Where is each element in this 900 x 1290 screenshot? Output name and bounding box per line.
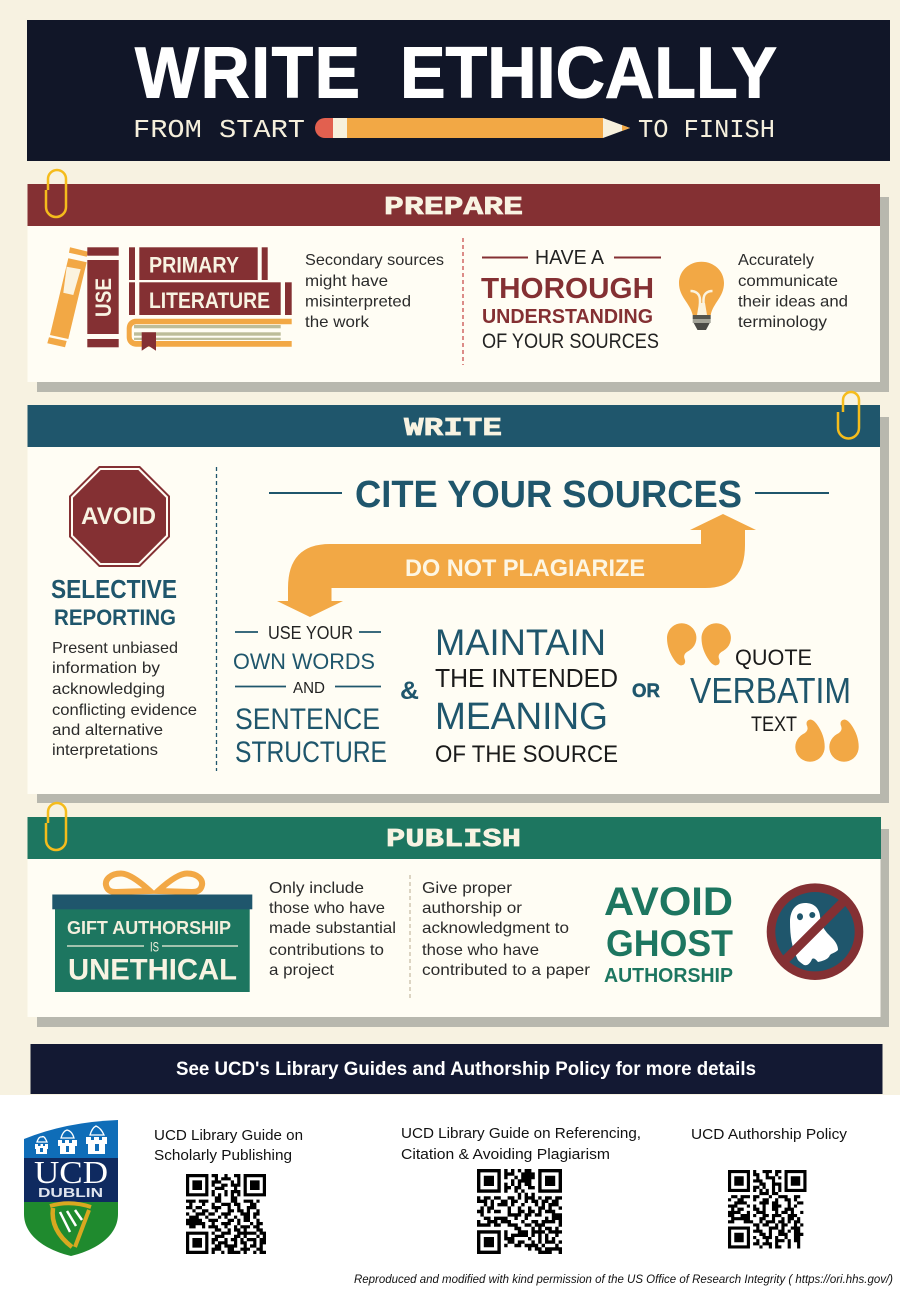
heading: avoid ghost authorship: AVOID <box>604 880 733 924</box>
arrow: do not plagiarize <box>277 514 756 617</box>
write heading band: WRITE <box>404 413 502 443</box>
text: only include contributors <box>269 880 396 979</box>
text: quote verbatim text: TEXT <box>751 713 797 736</box>
icon: gift box: UNETHICAL <box>68 954 237 986</box>
text: maintain the intended meaning: MEANING <box>435 696 608 738</box>
text: secondary sources: misinterpreted <box>305 294 411 310</box>
subtitle: from start: FROM START <box>133 115 305 145</box>
text: give proper authorship: those who have <box>422 942 539 959</box>
text: secondary sources: the work <box>305 314 370 331</box>
arrow: do not plagiarize: DO NOT PLAGIARIZE <box>405 555 645 582</box>
logo wordmark: UCD <box>34 1154 108 1190</box>
publish heading band <box>28 817 881 859</box>
text: library guide on scholarly publishing <box>154 1127 303 1164</box>
text: referencing guide: UCD Library Guide on Referencing, <box>401 1125 641 1142</box>
text: secondary sources <box>305 252 444 331</box>
text: use your own words and sentence structure: OWN WORDS <box>233 649 375 674</box>
icon: pencil <box>315 118 630 138</box>
write heading band <box>28 405 880 447</box>
harp <box>50 1203 91 1247</box>
text: library guide on scholarly publishing: UCD Library Guide on <box>154 1127 303 1144</box>
text: maintain the intended meaning: MAINTAIN <box>435 622 606 663</box>
text: give proper authorship: authorship or <box>422 900 523 917</box>
QR code: referencing guide <box>477 1169 562 1257</box>
text: secondary sources: Secondary sources <box>305 252 444 269</box>
text: referencing guide: Citation & Avoiding Plagiarism <box>401 1146 610 1163</box>
text: quote verbatim text <box>690 645 851 736</box>
panel: write <box>28 392 889 803</box>
ampersand: & <box>400 677 419 705</box>
subtitle: to finish: TO FINISH <box>638 115 775 145</box>
text: only include contributors: Only include <box>269 880 364 897</box>
prepare heading band: PREPARE <box>384 192 523 222</box>
text: unbiased information <box>52 640 197 759</box>
icon: opening quotation marks <box>667 623 731 666</box>
heading: have a thorough understanding <box>481 247 661 353</box>
text: maintain the intended meaning: OF THE SOURCE <box>435 741 618 768</box>
text: unbiased information: information by <box>52 660 160 677</box>
footer bar: See UCD's Library Guides and Authorship Policy for more details <box>176 1058 756 1080</box>
text: give proper authorship <box>422 880 591 979</box>
heading: avoid ghost authorship: AUTHORSHIP <box>604 964 733 987</box>
text: only include contributors: a project <box>269 962 335 979</box>
text: quote verbatim text: VERBATIM <box>690 670 851 711</box>
text: accurately communicate: terminology <box>738 314 827 331</box>
text: only include contributors: made substantial <box>269 920 396 937</box>
castles <box>35 1126 107 1154</box>
text: unbiased information: conflicting evidence <box>52 702 197 719</box>
text: secondary sources: might have <box>305 273 388 290</box>
icon: stack of books: LITERATURE <box>149 288 270 313</box>
text: unbiased information: Present unbiased <box>52 640 178 657</box>
icon: paperclip <box>46 803 66 850</box>
text: quote verbatim text: QUOTE <box>735 645 812 670</box>
prepare heading band <box>28 184 880 226</box>
footer bar <box>30 1044 882 1094</box>
text: accurately communicate: their ideas and <box>738 294 848 310</box>
credit line: Reproduced and modified with kind permission of the US Office of Research Integrity ( https://ori.hhs.gov/) <box>354 1274 893 1286</box>
heading: cite your sources: CITE YOUR SOURCES <box>355 474 742 516</box>
heading: avoid ghost authorship: GHOST <box>606 923 733 964</box>
text: unbiased information: and alternative <box>52 722 163 739</box>
text: only include contributors: contributions to <box>269 942 384 959</box>
or connector: OR <box>632 681 660 702</box>
text: use your own words and sentence structure: SENTENCE <box>235 703 380 736</box>
icon: avoid stop sign: AVOID <box>81 503 156 530</box>
icon: gift box <box>52 874 252 992</box>
icon: gift box: IS <box>150 940 159 954</box>
icon: stack of books: USE <box>91 278 116 317</box>
heading: selective reporting: SELECTIVE <box>51 574 177 604</box>
heading: have a thorough understanding: HAVE A <box>535 247 605 269</box>
icon: avoid stop sign <box>69 466 170 567</box>
text: authorship policy: UCD Authorship Policy <box>691 1126 848 1143</box>
panel: publish <box>28 803 889 1027</box>
text: unbiased information: interpretations <box>52 742 158 759</box>
icon: paperclip <box>838 392 859 438</box>
heading: have a thorough understanding: UNDERSTANDING <box>482 305 653 328</box>
publish heading band: PUBLISH <box>386 824 521 854</box>
icon: closing quotation marks <box>795 720 859 762</box>
text: give proper authorship: contributed to a paper <box>422 962 591 979</box>
text: accurately communicate: communicate <box>738 273 838 290</box>
text: give proper authorship: acknowledgment to <box>422 920 569 937</box>
text: use your own words and sentence structure: USE YOUR <box>268 623 353 643</box>
icon: stack of books: PRIMARY <box>149 252 239 278</box>
heading: selective reporting <box>51 574 177 630</box>
text: use your own words and sentence structure <box>233 623 387 769</box>
title: ETHICALLY <box>400 31 777 113</box>
heading: selective reporting: REPORTING <box>54 605 176 630</box>
text: unbiased information: acknowledging <box>52 681 165 698</box>
icon: paperclip <box>46 170 66 217</box>
text: referencing guide <box>401 1125 641 1163</box>
UCD Dublin logo <box>24 1120 118 1256</box>
heading: avoid ghost authorship <box>604 880 733 987</box>
icon: stack of books <box>47 247 292 351</box>
text: use your own words and sentence structure: AND <box>293 680 325 697</box>
title: WRITE <box>135 31 360 113</box>
text: give proper authorship: Give proper <box>422 880 513 897</box>
text: only include contributors: those who have <box>269 900 385 917</box>
heading: have a thorough understanding: OF YOUR SOURCES <box>482 329 659 353</box>
text: library guide on scholarly publishing: Scholarly Publishing <box>154 1147 292 1164</box>
text: accurately communicate <box>738 252 848 331</box>
icon: no ghost sign <box>771 888 859 976</box>
text: use your own words and sentence structure: STRUCTURE <box>235 736 387 769</box>
text: accurately communicate: Accurately <box>738 252 814 269</box>
icon: gift box: GIFT AUTHORSHIP <box>67 917 231 938</box>
panel: prepare <box>28 170 889 392</box>
icon: light bulb <box>679 262 724 330</box>
logo wordmark: DUBLIN <box>38 1186 103 1200</box>
heading: have a thorough understanding: THOROUGH <box>481 273 654 305</box>
title <box>135 31 777 113</box>
header banner <box>27 20 890 161</box>
QR code: scholarly publishing <box>186 1174 269 1254</box>
text: maintain the intended meaning: THE INTENDED <box>435 663 618 693</box>
QR code: authorship policy <box>728 1170 806 1248</box>
text: maintain the intended meaning <box>435 622 618 768</box>
